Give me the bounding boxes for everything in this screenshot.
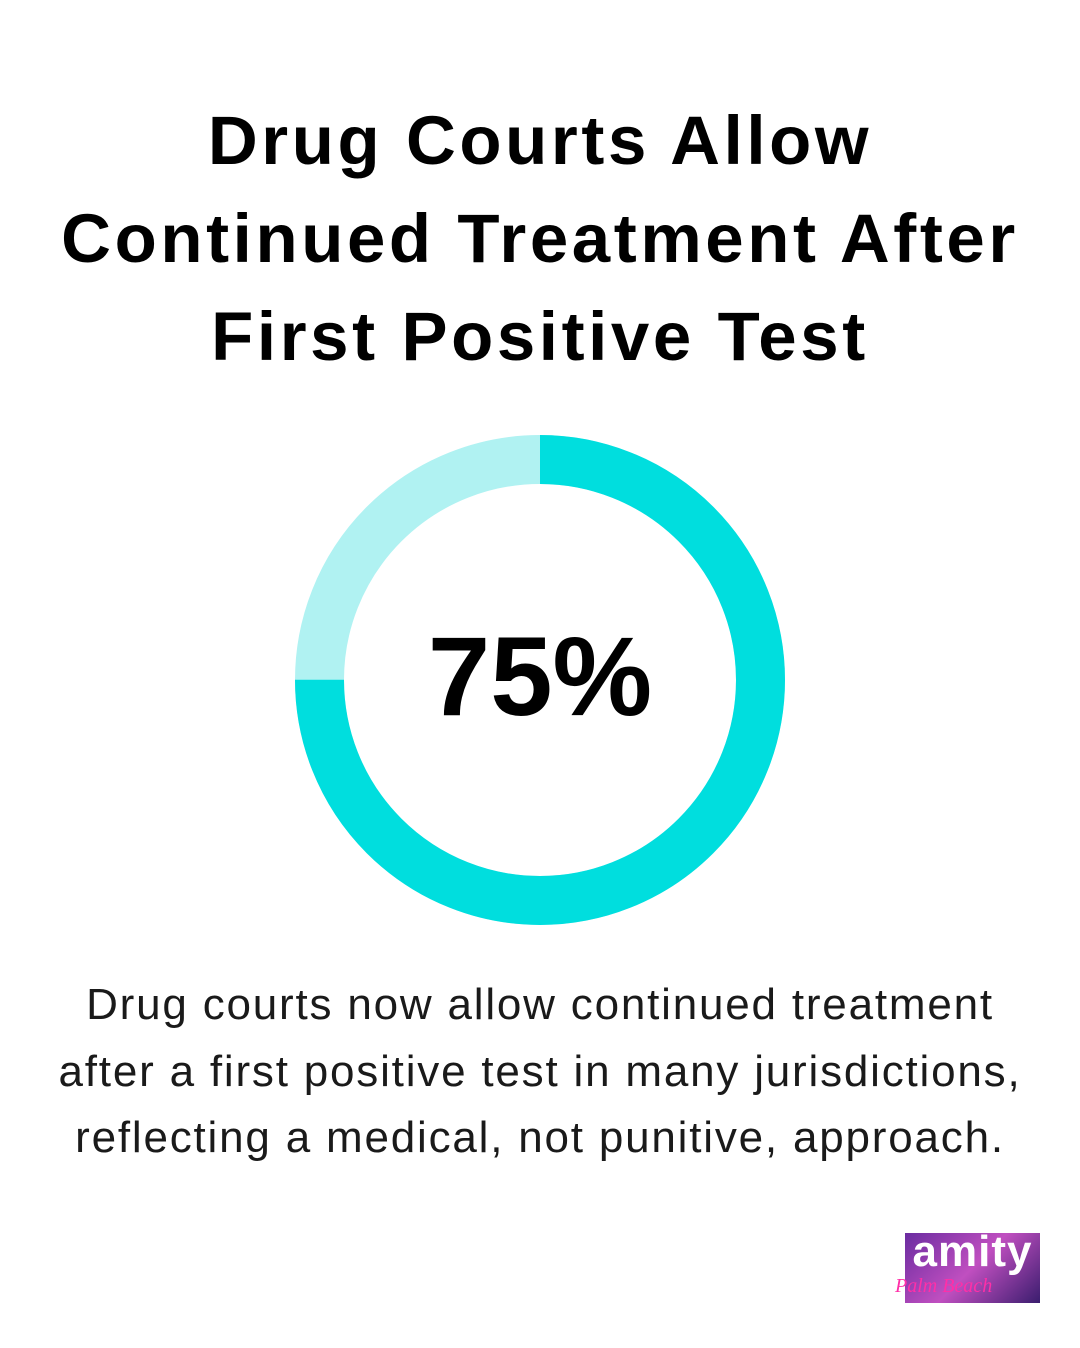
logo: amity [913, 1227, 1032, 1276]
title: Drug Courts Allow [208, 102, 872, 179]
body text [58, 980, 1022, 1162]
logo: Palm Beach [895, 1275, 992, 1297]
body text: Drug courts now allow continued treatment [86, 980, 994, 1029]
body text: after a first positive test in many jurisdictions, [58, 1046, 1022, 1096]
title [61, 102, 1019, 375]
donut chart: 75% [428, 614, 652, 739]
body text: reflecting a medical, not punitive, approach. [75, 1113, 1005, 1162]
title: First Positive Test [211, 298, 869, 375]
logo [905, 1233, 1040, 1303]
title: Continued Treatment After [61, 200, 1019, 277]
